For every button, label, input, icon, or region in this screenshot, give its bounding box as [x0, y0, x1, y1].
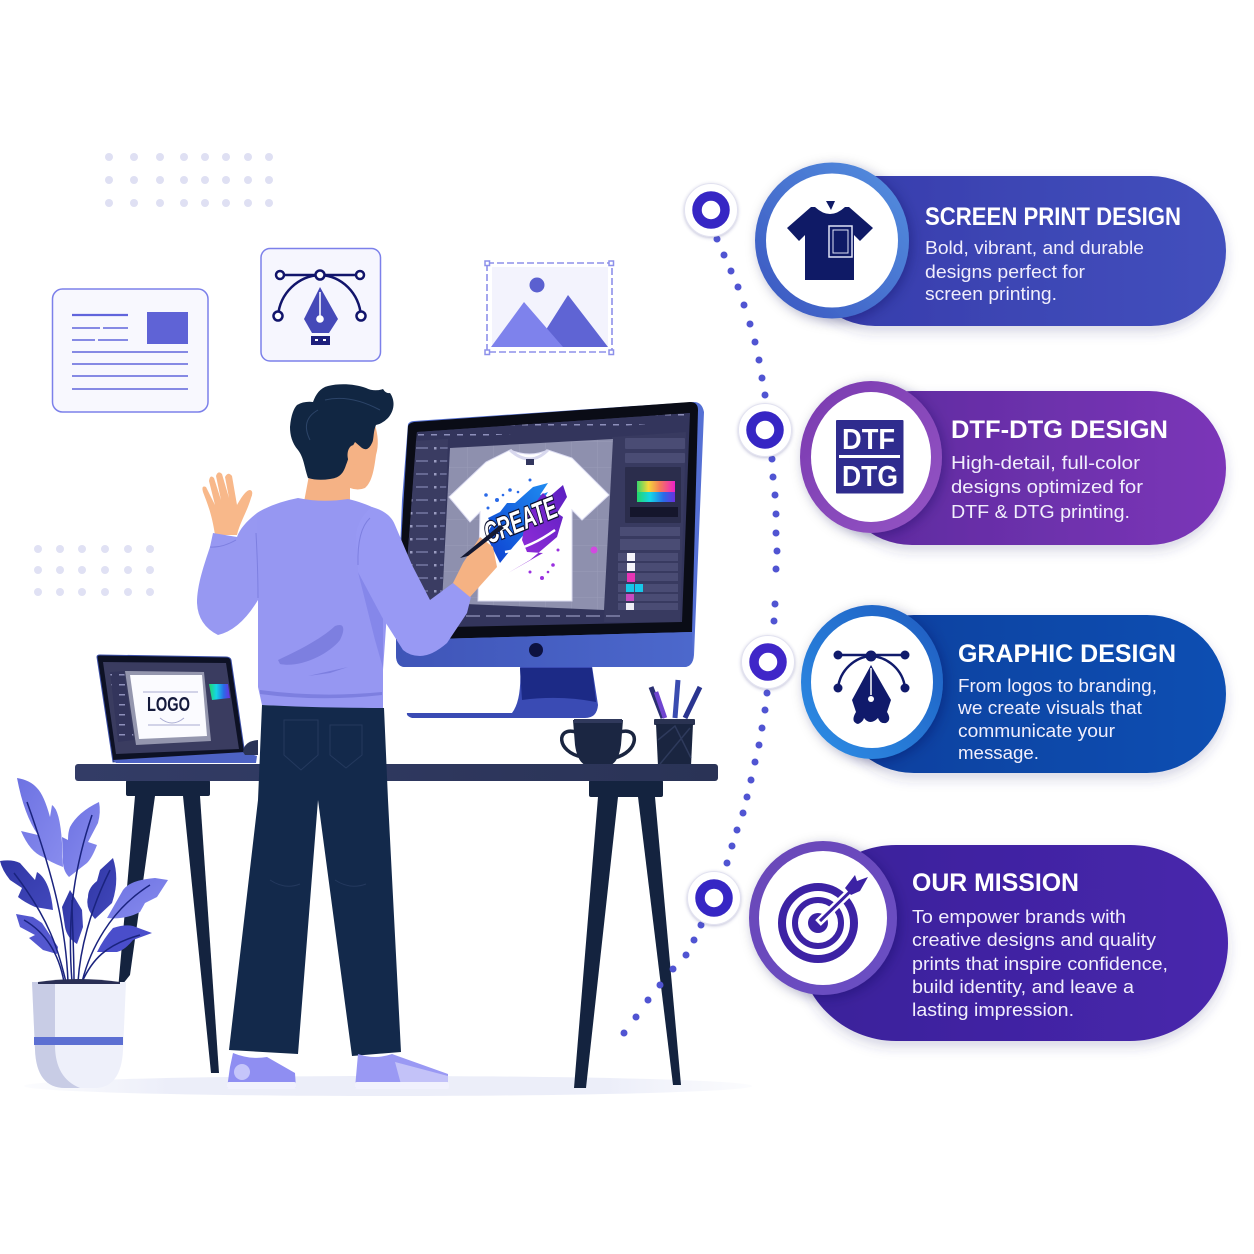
panel: our mission	[749, 841, 1228, 1041]
floating card: image placeholder	[485, 261, 614, 354]
plant stems	[14, 802, 150, 982]
badge: dtf dtg	[800, 381, 942, 533]
leaf: top centre	[62, 802, 100, 877]
description: Bold, vibrant, and durable	[925, 237, 1144, 258]
description	[951, 452, 1143, 522]
icon: dtf dtg box	[836, 420, 904, 494]
ground shadow	[24, 1076, 752, 1096]
timeline node 2	[738, 404, 792, 456]
description	[957, 675, 1157, 763]
description: screen printing.	[925, 283, 1057, 304]
icon: t-shirt	[787, 201, 873, 280]
description: creative designs and quality	[912, 929, 1157, 950]
neck and face	[304, 425, 378, 502]
leaf: middle dark right	[87, 858, 116, 919]
right panels	[618, 438, 685, 610]
description	[925, 237, 1144, 304]
leaf: far left	[0, 860, 53, 910]
left sleeve	[197, 513, 268, 635]
description: designs optimized for	[951, 476, 1143, 497]
leaf: lower left	[16, 914, 58, 954]
logo lettering: LOGO	[147, 694, 190, 716]
badge: t-shirt	[755, 162, 909, 318]
leaf: centre dark	[62, 890, 83, 944]
badge: target	[749, 841, 897, 995]
desk	[75, 764, 718, 1088]
plant	[0, 778, 168, 1088]
right arm	[356, 507, 471, 656]
plant pot	[32, 979, 126, 1088]
description: we create visuals that	[957, 697, 1142, 718]
monitor logo button	[529, 643, 543, 657]
description: From logos to branding,	[958, 675, 1157, 696]
timeline node 4	[688, 872, 740, 924]
colour palette	[637, 481, 675, 492]
leaf: right light	[107, 878, 168, 918]
icon: pen tool	[834, 650, 910, 724]
icon: dtf dtg box: DTG	[842, 461, 898, 493]
left hand	[202, 472, 252, 535]
timeline node 3	[742, 636, 794, 688]
description: prints that inspire confidence,	[912, 953, 1168, 974]
leaf: lower right	[97, 925, 152, 952]
create lettering: CREATE	[479, 491, 563, 550]
desk top	[75, 764, 718, 781]
desk legs	[118, 780, 681, 1088]
panel: graphic design	[801, 605, 1226, 773]
leaf: top left	[17, 778, 63, 867]
ear	[348, 445, 360, 465]
icon: dtf dtg box: DTF	[842, 424, 895, 456]
dotted timeline	[620, 236, 780, 1036]
monitor	[0, 162, 1228, 1089]
designer figure	[197, 384, 504, 1089]
layer swatches	[626, 553, 643, 610]
t-shirt on screen	[449, 450, 609, 601]
floating card: document layout	[52, 289, 208, 412]
panel: screen print design	[755, 162, 1226, 326]
software screen	[402, 413, 690, 628]
canvas	[442, 439, 613, 610]
right hand with stylus	[453, 525, 504, 597]
hair	[290, 384, 394, 480]
dot grid: top left	[105, 153, 273, 207]
description: message.	[958, 742, 1039, 763]
description: DTF & DTG printing.	[951, 501, 1130, 522]
heading: OUR MISSION	[912, 869, 1079, 897]
coffee mug	[562, 719, 634, 766]
description: communicate your	[958, 720, 1115, 741]
underarm shadow	[358, 572, 383, 668]
monitor body	[396, 402, 704, 667]
timeline node 1	[684, 184, 738, 236]
description: High-detail, full-color	[951, 452, 1140, 473]
badge: pen tool	[801, 605, 943, 759]
sweater torso	[257, 498, 390, 708]
splash art	[479, 478, 567, 580]
heading: GRAPHIC DESIGN	[958, 640, 1176, 668]
legs and jeans	[229, 705, 401, 1056]
monitor stand	[407, 666, 598, 718]
pencil cup	[651, 680, 700, 766]
floating card: pen tool	[261, 248, 380, 361]
sweater folds	[260, 625, 382, 698]
panel: dtf-dtg design	[800, 381, 1226, 545]
heading: SCREEN PRINT DESIGN	[925, 203, 1181, 231]
icon: target and arrow	[782, 875, 868, 959]
laptop	[97, 655, 258, 763]
heading: DTF-DTG DESIGN	[951, 416, 1168, 444]
description: To empower brands with	[912, 906, 1126, 927]
description: build identity, and leave a	[912, 976, 1135, 997]
dot grid: middle left	[34, 545, 154, 596]
description: designs perfect for	[925, 261, 1085, 282]
description	[912, 906, 1168, 1020]
description: lasting impression.	[912, 999, 1074, 1020]
shoes	[227, 1053, 449, 1089]
